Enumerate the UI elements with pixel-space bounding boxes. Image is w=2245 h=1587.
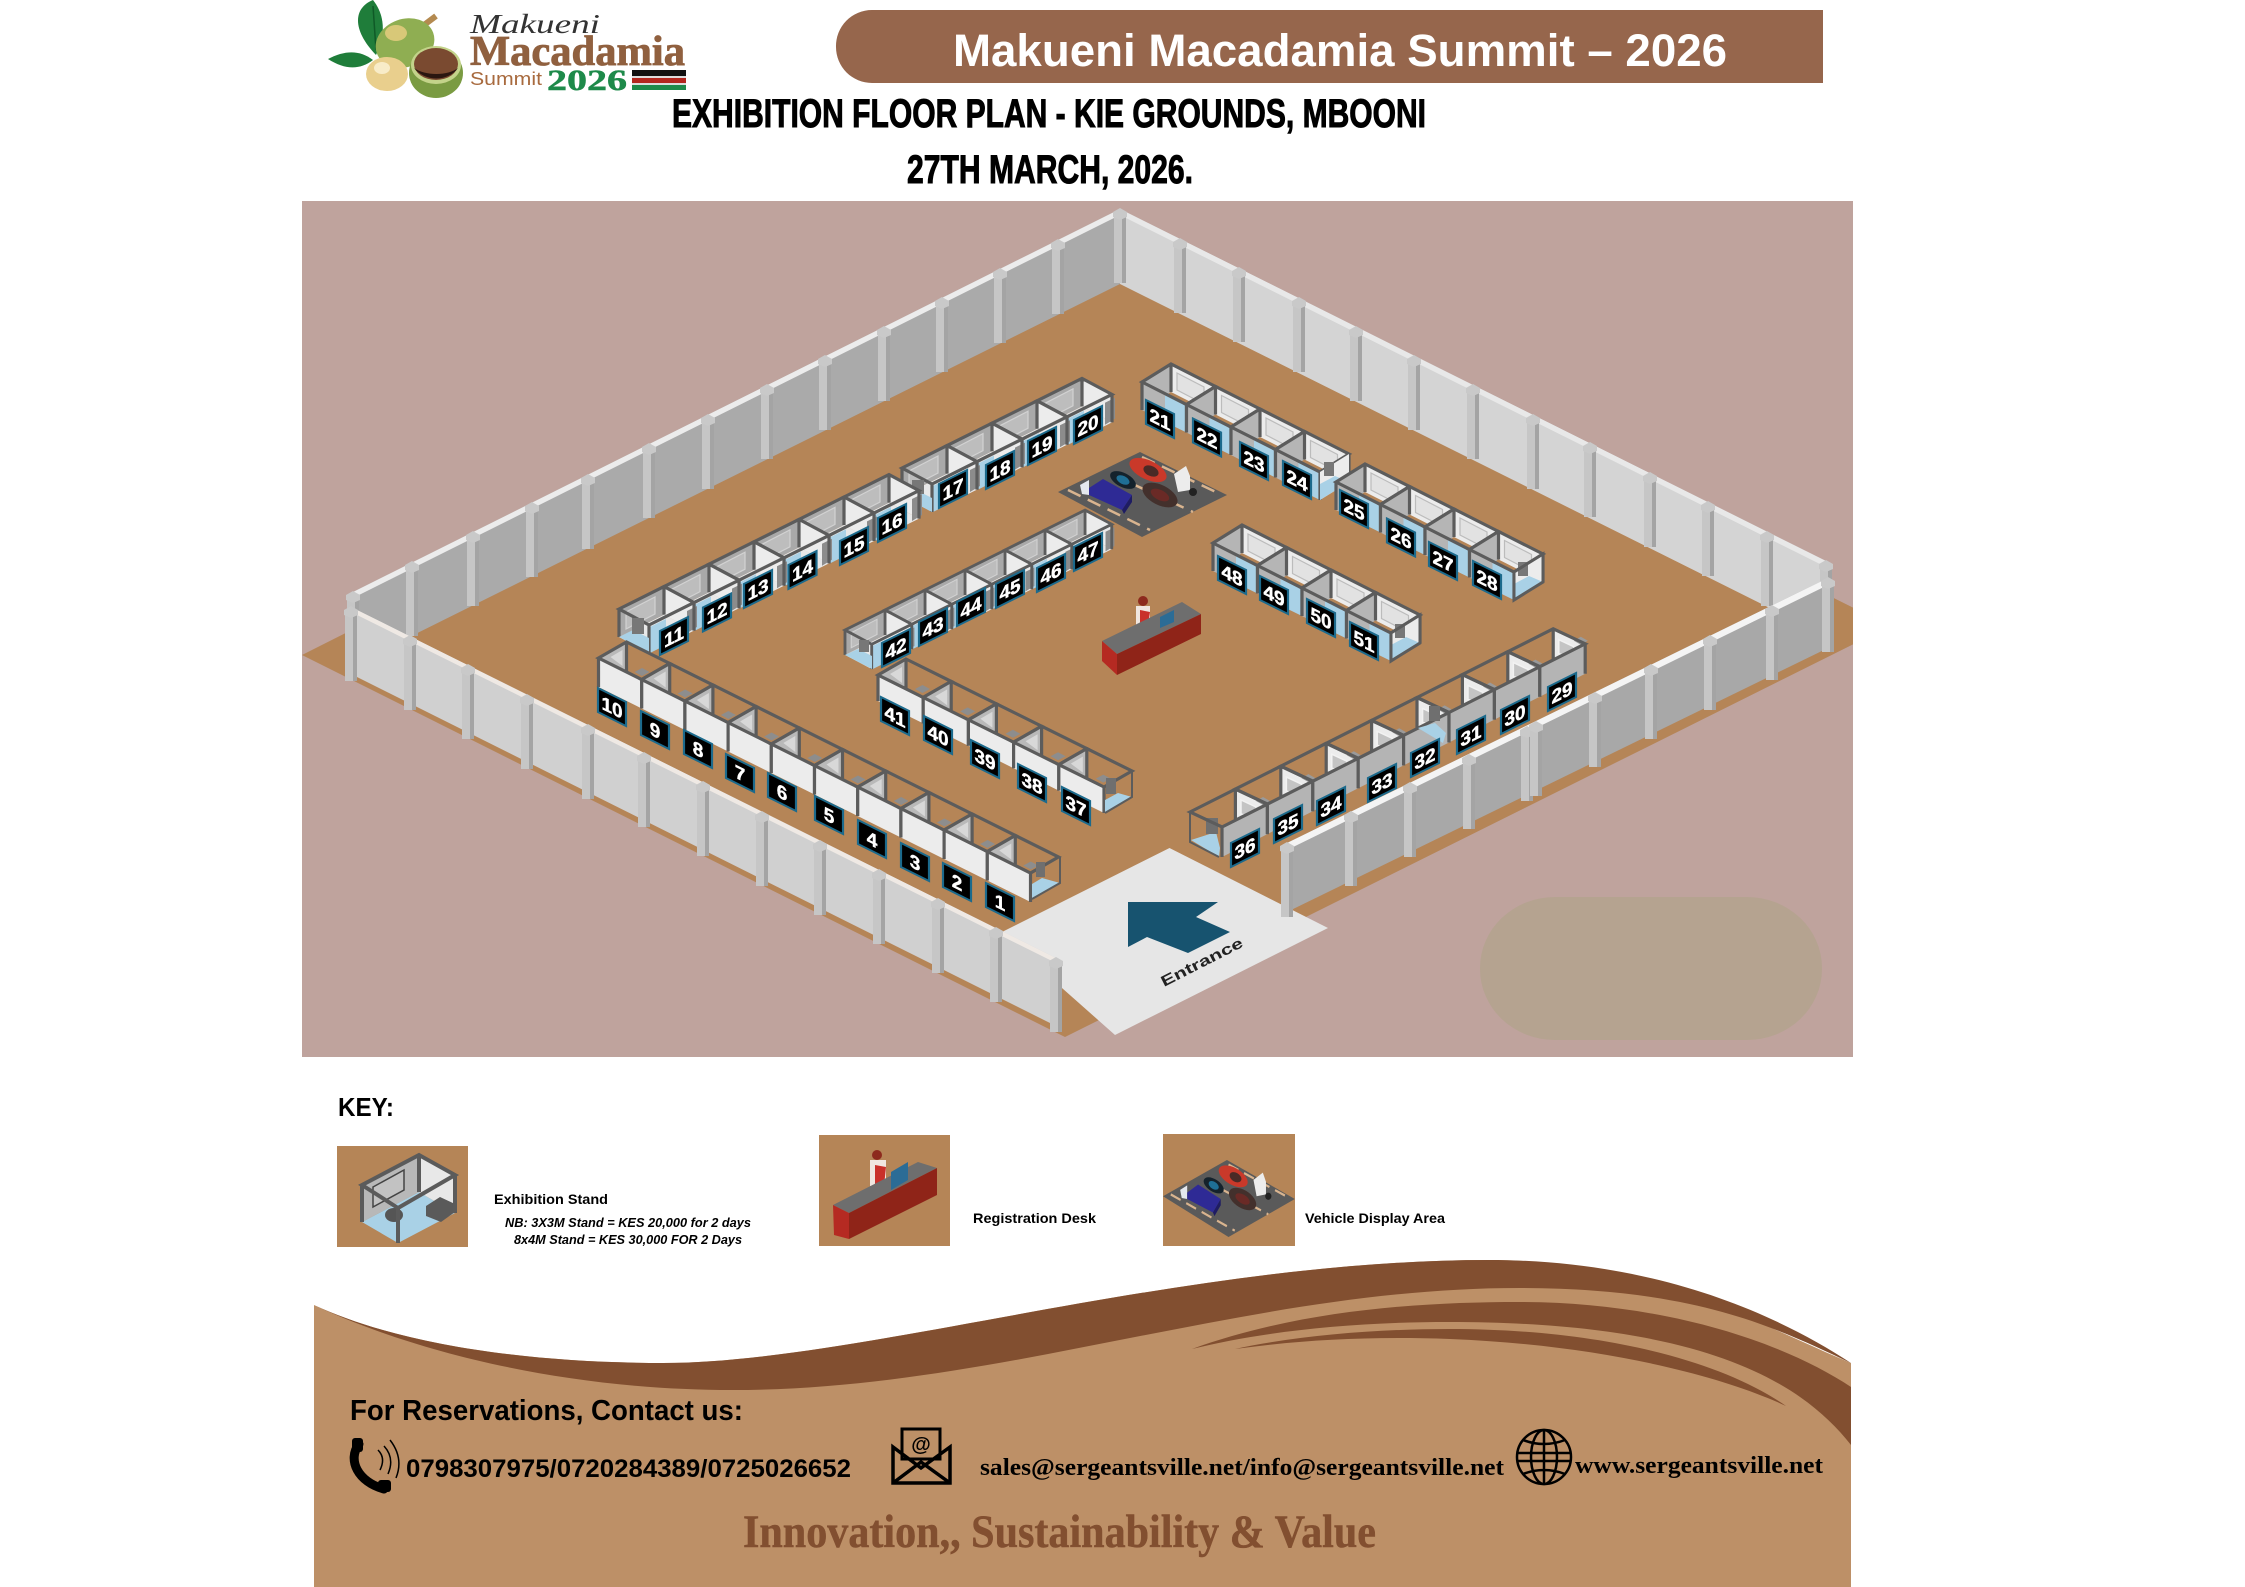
key label: exhibition stand: Exhibition Stand [494,1191,608,1207]
stands 17 to 20 frames [902,378,1115,512]
floor plan title: EXHIBITION FLOOR PLAN - KIE GROUNDS, MBOONI [672,92,1426,136]
stand numbers 29 to 36: 33 [1371,769,1393,800]
key label: vehicle display area: Vehicle Display Area [1305,1210,1445,1226]
stand numbers 29 to 36: 36 [1234,834,1256,865]
entrance pad [1000,848,1328,1035]
stand numbers 42 to 47: 43 [922,613,944,644]
registration desk [1102,596,1201,675]
tagline: Innovation,, Sustainability & Value [743,1506,1376,1558]
stand numbers 37 to 41: 41 [884,702,906,733]
key icon: exhibition stand [337,1146,468,1247]
stand numbers 1 to 10: 2 [952,870,962,896]
website: www.sergeantsville.net [1575,1453,1823,1479]
stand numbers 21 to 28: 24 [1286,466,1308,497]
stand numbers 42 to 47: 44 [960,592,982,624]
back-right perimeter wall [1113,208,1833,636]
stand numbers 29 to 36 [1231,673,1576,867]
stand numbers 11 to 20: 20 [1077,411,1099,442]
stands 25 to 28 frames [1336,464,1543,600]
stand numbers 11 to 20: 14 [792,555,814,587]
footer panel [314,1260,1851,1587]
stand numbers 21 to 28: 28 [1476,566,1498,597]
stand numbers 11 to 20: 13 [747,575,769,606]
icon: globe [1517,1430,1571,1484]
stand numbers 21 to 28: 26 [1390,523,1412,554]
stand numbers 42 to 47: 47 [1077,538,1099,569]
icon: email envelope [893,1429,950,1483]
stand numbers 29 to 36: 35 [1277,810,1299,841]
key label: registration desk: Registration Desk [973,1210,1096,1226]
icon: phone [352,1438,399,1492]
footer brown wave [314,1260,1851,1390]
entrance label: Entrance [1158,935,1246,991]
footer tan background [314,1260,1851,1587]
back-left perimeter wall [346,209,1120,666]
icon: email envelope: @ [911,1434,931,1456]
header banner [836,10,1823,83]
person at desk [1136,596,1150,626]
stands 48 to 51 frames [1213,525,1420,661]
entrance arrow [1128,902,1230,953]
stand numbers 29 to 36: 29 [1551,678,1573,709]
phone numbers: 0798307975/0720284389/0725026652 [406,1455,851,1483]
front-left perimeter wall [344,606,1063,1032]
stand numbers 1 to 10: 10 [601,693,623,724]
stand numbers 37 to 41: 39 [974,745,996,776]
key icon: vehicle display area [1163,1134,1295,1246]
front-right perimeter wall [1280,577,1835,917]
stand numbers 11 to 20: 12 [706,598,728,629]
footer lower swoosh [1235,1329,1786,1406]
key note: 8x4 price: 8x4M Stand = KES 30,000 FOR 2 Days [514,1232,742,1247]
logo text Makueni: Makueni [469,9,600,39]
stand numbers 21 to 28: 23 [1243,447,1265,478]
stands 11 to 16 frames [619,475,922,653]
stand numbers 1 to 10: 4 [867,827,878,854]
stand numbers 37 to 41: 40 [927,721,949,752]
stand numbers 37 to 41: 37 [1065,792,1087,823]
stand numbers 11 to 20: 15 [843,532,865,563]
stand numbers 42 to 47: 42 [885,634,907,665]
stand numbers 42 to 47 [882,533,1102,667]
stand numbers 29 to 36: 31 [1460,721,1482,752]
blank tan placeholder [1480,897,1822,1040]
stand numbers 48 to 51: 51 [1353,627,1375,658]
footer upper swoosh [1192,1302,1851,1445]
stand numbers 29 to 36: 34 [1320,791,1342,823]
floor plan illustration [302,208,1890,1040]
stand numbers 1 to 10: 8 [693,737,703,763]
stand numbers 1 to 10: 5 [824,803,834,829]
stand numbers 11 to 20: 19 [1031,432,1053,463]
stand numbers 48 to 51: 49 [1263,581,1285,612]
stands 29 to 36 frames [1190,629,1588,857]
stands 21 to 24 frames [1142,364,1349,500]
stand numbers 1 to 10 [598,688,1014,921]
stand numbers 21 to 28 [1146,400,1501,599]
stand numbers 1 to 10: 9 [650,718,660,744]
stand numbers 29 to 36: 32 [1414,744,1436,775]
key icon: registration desk [819,1135,950,1246]
stand numbers 1 to 10: 3 [910,850,920,876]
stand numbers 48 to 51 [1218,556,1378,660]
stand numbers 11 to 20 [660,406,1102,655]
stand numbers 21 to 28: 27 [1432,547,1454,578]
stand numbers 11 to 20: 11 [664,622,684,653]
stands 42 to 47 frames [845,510,1114,669]
stand numbers 21 to 28: 22 [1196,423,1218,454]
stand numbers 21 to 28: 21 [1149,405,1171,436]
stand numbers 1 to 10: 7 [735,761,745,787]
logo [328,0,686,98]
logo text Macadamia: Macadamia [470,29,685,75]
stands 37 to 41 frames [878,659,1132,813]
floor plan date: 27TH MARCH, 2026. [907,148,1193,192]
key heading: KEY: [338,1092,394,1122]
exhibition floor [302,243,1890,1037]
stand numbers 48 to 51: 48 [1221,561,1243,592]
stand numbers 11 to 20: 16 [881,509,903,540]
banner title: Makueni Macadamia Summit – 2026 [953,25,1727,76]
logo flag [632,70,686,90]
stand numbers 11 to 20: 18 [989,456,1011,487]
vehicle display area [1058,452,1227,537]
logo text 2026: 2026 [547,64,627,97]
stand numbers 42 to 47: 46 [1040,559,1062,590]
key note: 3x3 price: NB: 3X3M Stand = KES 20,000 for 2 days [505,1215,751,1230]
stand numbers 42 to 47: 45 [999,575,1021,606]
stand numbers 29 to 36: 30 [1504,701,1526,732]
stand numbers 21 to 28: 25 [1343,495,1365,526]
stand numbers 1 to 10: 1 [995,890,1005,916]
floor plan panel background [302,201,1853,1057]
email addresses: sales@sergeantsville.net/info@sergeantsville.net [980,1455,1504,1481]
reservations heading: For Reservations, Contact us: [350,1395,743,1427]
stand numbers 1 to 10: 6 [777,780,787,806]
stand numbers 37 to 41 [881,697,1090,825]
stand numbers 11 to 20: 17 [942,475,964,506]
logo nuts and leaves [328,0,463,98]
logo text Summit: Summit [470,69,542,89]
stand numbers 48 to 51: 50 [1310,604,1332,635]
stand numbers 37 to 41: 38 [1021,769,1043,800]
stands 1 to 10 frames [598,642,1060,902]
